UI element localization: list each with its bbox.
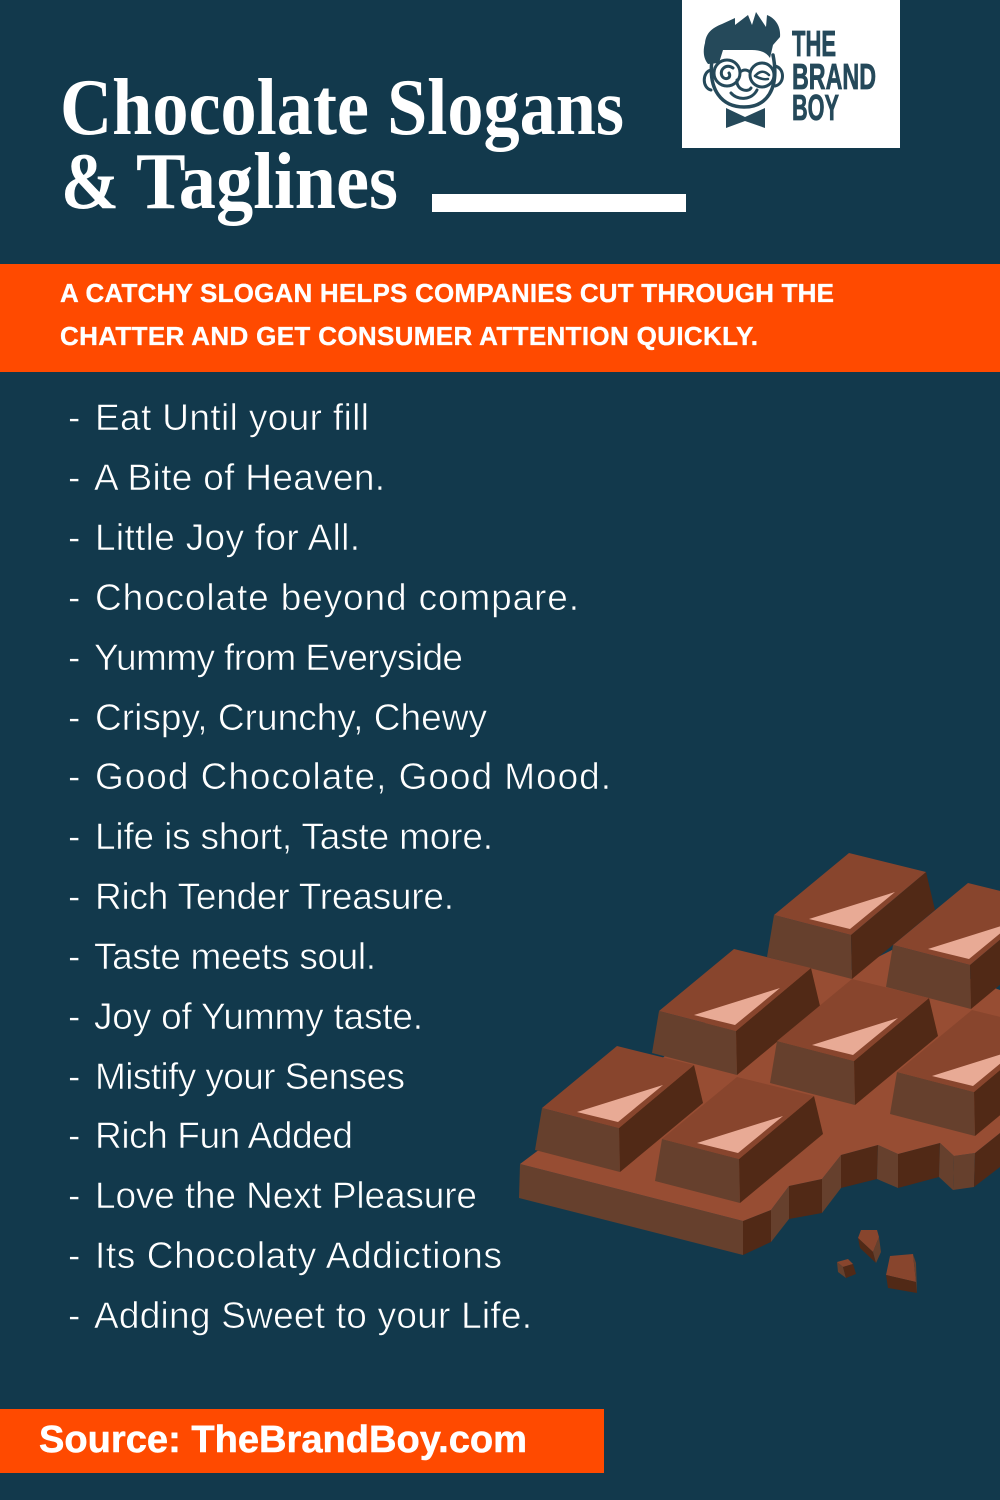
slogan list: Yummy from Everyside — [94, 637, 463, 678]
slogan list: Adding Sweet to your Life. — [94, 1295, 532, 1336]
slogan list: Love the Next Pleasure — [95, 1175, 477, 1216]
slogan list: Rich Fun Added — [95, 1115, 353, 1156]
slogan list: - — [68, 1175, 80, 1216]
title: & — [61, 138, 119, 226]
slogan list: - — [68, 996, 80, 1037]
slogan list: - — [68, 457, 80, 498]
title: Taglines — [136, 138, 398, 226]
slogan list: Its Chocolaty Addictions — [95, 1235, 502, 1276]
chocolate crumbs — [837, 1230, 917, 1293]
slogan list: Life is short, Taste more. — [95, 816, 493, 857]
chocolate bar illustration — [519, 853, 1000, 1293]
orange subtitle banner: CHATTER AND GET CONSUMER ATTENTION QUICKLY. — [60, 321, 758, 351]
slogan list: Good Chocolate, Good Mood. — [95, 756, 611, 797]
slogan list: Joy of Yummy taste. — [94, 996, 423, 1037]
slogan list: - — [68, 577, 80, 618]
slogan list: - — [68, 637, 80, 678]
slogan list: A Bite of Heaven. — [94, 457, 385, 498]
slogan list: - — [68, 756, 80, 797]
slogan list: Rich Tender Treasure. — [95, 876, 454, 917]
slogan list: - — [68, 1295, 80, 1336]
slogan list: - — [68, 876, 80, 917]
slogan list: - — [68, 397, 80, 438]
slogan list: - — [68, 1235, 80, 1276]
title: Chocolate Slogans — [60, 64, 624, 152]
orange subtitle banner — [0, 264, 1000, 372]
source banner — [0, 1409, 604, 1473]
slogan list: Taste meets soul. — [94, 936, 376, 977]
slogan list: - — [68, 1115, 80, 1156]
slogan list: - — [68, 816, 80, 857]
title — [60, 64, 624, 226]
chocolate base top — [520, 950, 1000, 1221]
icon: boy with glasses — [704, 12, 782, 128]
slogan list: Eat Until your fill — [95, 397, 369, 438]
logo wordmark — [792, 23, 876, 128]
orange subtitle banner: A CATCHY SLOGAN HELPS COMPANIES CUT THROUGH THE — [60, 278, 834, 308]
slogan list: - — [68, 936, 80, 977]
chocolate base side — [519, 1133, 1000, 1255]
slogan list: - — [68, 1056, 80, 1097]
logo wordmark: BRAND — [792, 56, 876, 97]
slogan list: Mistify your Senses — [95, 1056, 405, 1097]
logo wordmark: THE — [792, 23, 836, 64]
title accent bar — [432, 194, 686, 212]
slogan list: Little Joy for All. — [95, 517, 360, 558]
logo wordmark: BOY — [792, 87, 839, 128]
source banner: Source: TheBrandBoy.com — [39, 1419, 527, 1461]
chocolate squares — [535, 853, 1000, 1203]
slogan list: - — [68, 517, 80, 558]
slogan list — [68, 397, 611, 1336]
slogan list: Crispy, Crunchy, Chewy — [95, 697, 488, 738]
slogan list: Chocolate beyond compare. — [95, 577, 579, 618]
logo: The Brand Boy — [682, 0, 900, 148]
slogan list: - — [68, 697, 80, 738]
